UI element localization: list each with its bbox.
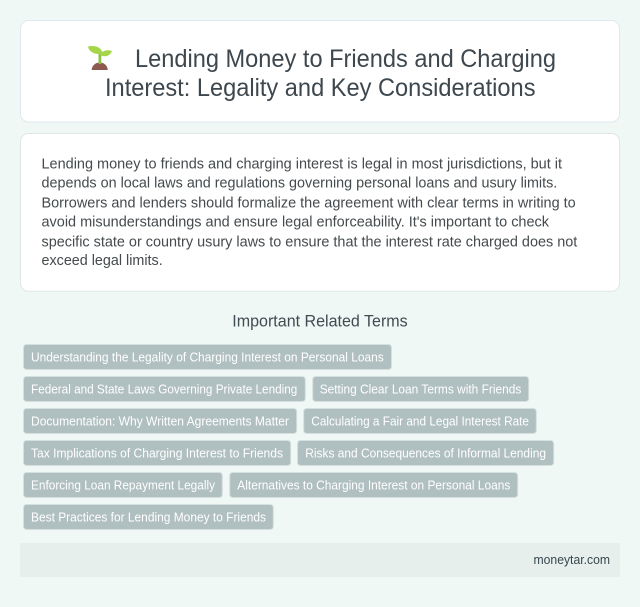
title: Lending Money to Friends and Charging <box>135 46 556 73</box>
panel: title card <box>20 20 620 122</box>
tag: risks and consequences: Risks and Consequences of Informal Lending <box>305 446 546 460</box>
tag: documentation: Documentation: Why Written Agreements Matter <box>31 414 289 428</box>
panel: summary paragraph: depends on local laws and regulations governing personal loans and usury limits. <box>42 176 557 192</box>
panel: summary paragraph: exceed legal limits. <box>42 253 163 269</box>
tag: understanding legality <box>24 344 392 370</box>
icon: sprout <box>88 46 112 70</box>
footer bar <box>20 543 620 577</box>
tag: setting clear loan terms: Setting Clear Loan Terms with Friends <box>320 382 521 396</box>
panel: summary paragraph <box>20 134 620 291</box>
tag: tax implications: Tax Implications of Charging Interest to Friends <box>31 446 283 460</box>
tag: alternatives: Alternatives to Charging Interest on Personal Loans <box>237 478 510 492</box>
tag: federal and state laws <box>24 376 305 402</box>
tag: alternatives <box>230 472 518 498</box>
panel: summary paragraph: Lending money to friends and charging interest is legal in most jurisdictions, but it <box>42 156 562 172</box>
footer bar: moneytar.com <box>534 552 610 567</box>
tag: tax implications <box>24 440 291 466</box>
tag: calculating interest rate <box>304 408 536 434</box>
heading: important related terms: Important Related Terms <box>232 313 408 331</box>
tag: federal and state laws: Federal and State Laws Governing Private Lending <box>31 382 297 396</box>
tag: documentation <box>24 408 297 434</box>
panel: summary paragraph: Borrowers and lenders should formalize the agreement with clear terms in writing to <box>42 195 576 211</box>
title <box>105 46 556 102</box>
tag: calculating interest rate: Calculating a Fair and Legal Interest Rate <box>311 414 529 428</box>
tag: enforcing repayment: Enforcing Loan Repayment Legally <box>31 478 216 492</box>
tag: understanding legality: Understanding the Legality of Charging Interest on Personal Loans <box>31 350 384 364</box>
tag: risks and consequences <box>298 440 554 466</box>
title: Interest: Legality and Key Considerations <box>105 75 536 102</box>
tag: best practices <box>24 504 273 530</box>
panel: summary paragraph: avoid misunderstandings and ensure legal enforceability. It's important to check <box>42 214 550 230</box>
panel: summary paragraph: specific state or country usury laws to ensure that the interest rate charged does not <box>42 234 577 250</box>
tag: enforcing repayment <box>24 472 222 498</box>
tag: best practices: Best Practices for Lending Money to Friends <box>31 510 266 524</box>
tag: setting clear loan terms <box>313 376 529 402</box>
